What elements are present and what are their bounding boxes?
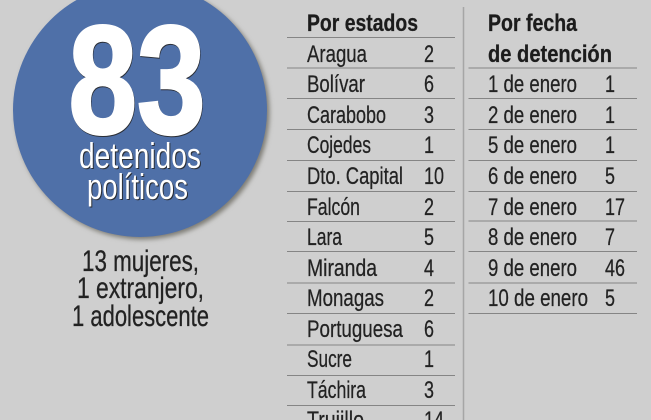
text block: breakdown — [72, 245, 209, 333]
row: Lara: 5 — [424, 224, 434, 251]
row: Carabobo: Carabobo — [307, 102, 386, 129]
row: 7 de enero: 17 — [605, 194, 625, 221]
row: 8 de enero: 7 — [605, 224, 615, 251]
row: Sucre: Sucre — [307, 346, 352, 373]
row: Cojedes: Cojedes — [307, 132, 371, 159]
blue circle — [13, 0, 267, 237]
text block: breakdown: 13 mujeres, — [82, 245, 199, 278]
row: Táchira: Táchira — [307, 377, 366, 404]
row: Carabobo: 3 — [424, 102, 434, 129]
heading: por estados: Por estados — [307, 10, 418, 37]
row: Falcón: 2 — [424, 194, 434, 221]
row: Dto. Capital: 10 — [424, 163, 444, 190]
row: Sucre: 1 — [424, 346, 434, 373]
label: detenidos políticos — [79, 135, 201, 207]
circle shadow — [16, 0, 270, 240]
row: Aragua: 2 — [424, 41, 434, 68]
label: detenidos políticos: políticos — [87, 166, 188, 207]
row: Monagas: Monagas — [307, 285, 384, 312]
row lines — [287, 38, 455, 406]
row: Bolívar: Bolívar — [307, 71, 365, 98]
row: Táchira: 3 — [424, 377, 434, 404]
row: Lara: Lara — [307, 224, 342, 251]
label shadow — [80, 136, 202, 208]
row: Cojedes: 1 — [424, 132, 434, 159]
text block: breakdown: 1 adolescente — [72, 300, 209, 333]
row: Aragua: Aragua — [307, 41, 367, 68]
date row lines — [468, 68, 637, 314]
row: Portuguesa: 6 — [424, 316, 434, 343]
row: 5 de enero: 1 — [605, 132, 615, 159]
panel: por estados — [287, 10, 455, 420]
row: Bolívar: 6 — [424, 71, 434, 98]
heading: por fecha de detención — [488, 10, 612, 68]
row: Falcón — [307, 194, 434, 221]
row: Miranda: Miranda — [307, 255, 377, 282]
row: 9 de enero: 9 de enero — [488, 255, 577, 282]
row: 2 de enero: 2 de enero — [488, 102, 577, 129]
heading: por fecha de detención: de detención — [488, 41, 612, 68]
panel: total circle — [13, 0, 270, 240]
label shadow: detenidos — [80, 136, 202, 177]
row: 8 de enero: 8 de enero — [488, 224, 577, 251]
row: 10 de enero: 5 — [605, 285, 615, 312]
row: 9 de enero: 46 — [605, 255, 625, 282]
row: 10 de enero: 10 de enero — [488, 285, 588, 312]
row: Dto. Capital: Dto. Capital — [307, 163, 403, 190]
row: Monagas: 2 — [424, 285, 434, 312]
heading: por fecha de detención: Por fecha — [488, 10, 577, 37]
row: 5 de enero: 5 de enero — [488, 132, 577, 159]
row: Falcón: Falcón — [307, 194, 360, 221]
row: Portuguesa: Portuguesa — [307, 316, 403, 343]
row: Sucre — [307, 346, 434, 373]
row: Aragua — [307, 41, 434, 68]
row: 7 de enero: 7 de enero — [488, 194, 577, 221]
row: Lara — [307, 224, 434, 251]
label shadow: políticos — [88, 167, 189, 208]
row: 1 de enero: 1 de enero — [488, 71, 577, 98]
row: Táchira — [307, 377, 434, 404]
label: detenidos políticos: detenidos — [79, 135, 201, 176]
row: 2 de enero: 1 — [605, 102, 615, 129]
row: Bolívar — [307, 71, 434, 98]
text block: breakdown: 1 extranjero, — [77, 272, 204, 305]
panel: por fecha de detención — [468, 10, 637, 314]
row: Miranda: 4 — [424, 255, 434, 282]
row: 6 de enero: 6 de enero — [488, 163, 577, 190]
big number shadow: 83 — [69, 0, 206, 167]
row: 6 de enero: 5 — [605, 163, 615, 190]
column divider — [462, 7, 464, 420]
row: 1 de enero: 1 — [605, 71, 615, 98]
row: Trujillo — [307, 407, 444, 420]
row: Miranda — [307, 255, 434, 282]
